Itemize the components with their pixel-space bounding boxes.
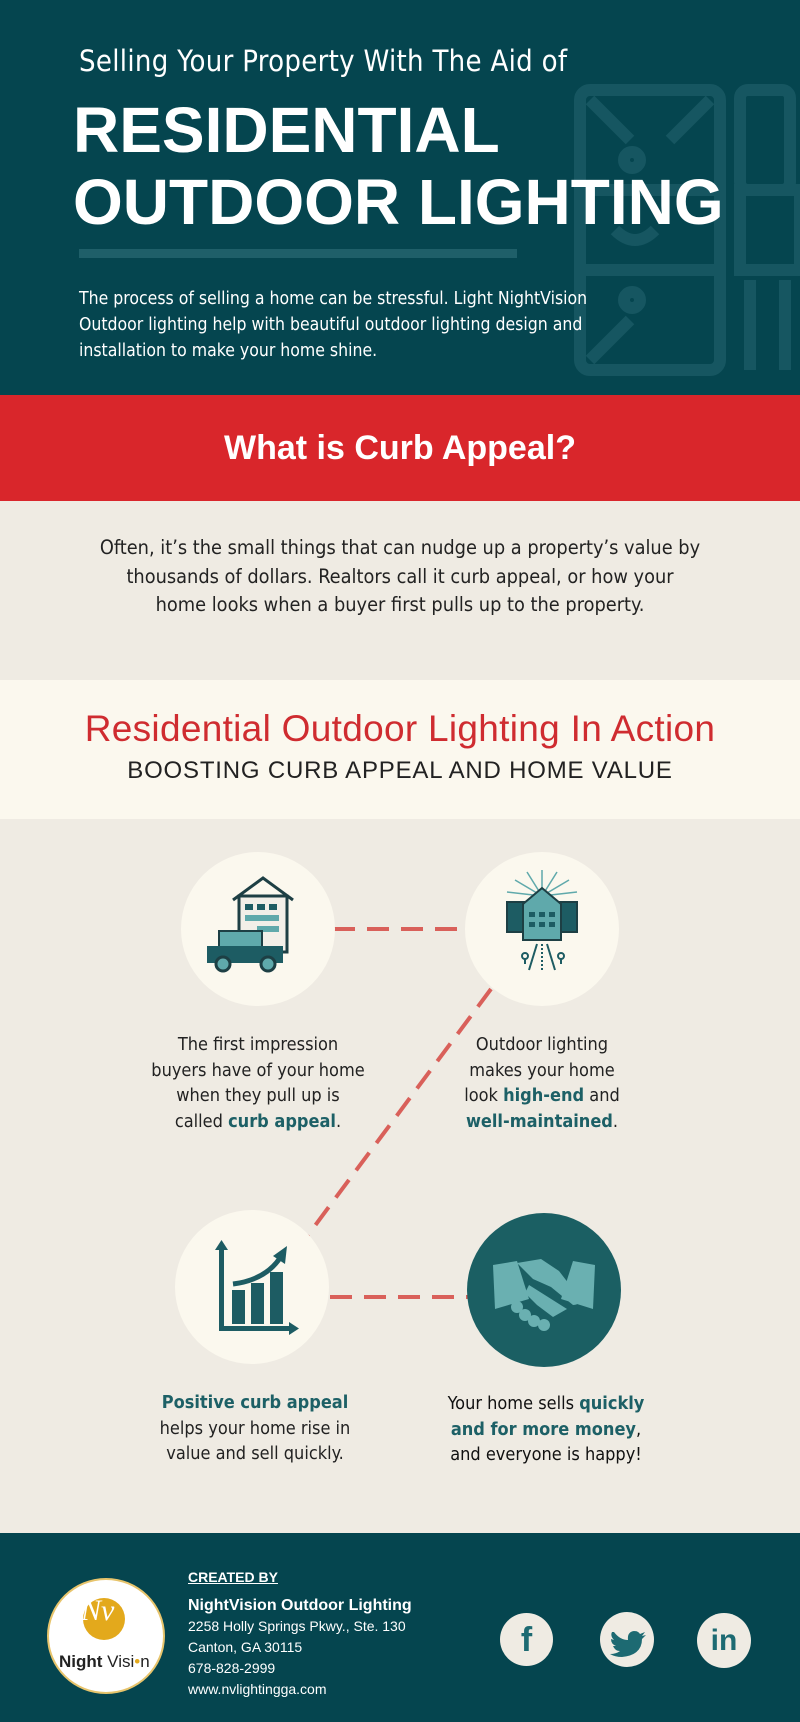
decorative background icon	[574, 84, 800, 376]
creator info: 2258 Holly Springs Pkwy., Ste. 130	[188, 1618, 406, 1634]
main title	[73, 94, 724, 238]
creator info: Canton, GA 30115	[188, 1639, 302, 1655]
creator info: www.nvlightingga.com	[188, 1681, 327, 1697]
step 1 text: buyers have of your home	[151, 1060, 365, 1080]
step 4 text: and everyone is happy!	[450, 1444, 642, 1465]
creator info: CREATED BY	[188, 1569, 278, 1585]
intro paragraph: The process of selling a home can be stressful. Light NightVision	[79, 289, 587, 309]
step 2 text: well-maintained.	[466, 1110, 618, 1132]
icon: growth chart	[175, 1210, 329, 1364]
step 2 text: look high-end and	[464, 1085, 620, 1106]
intro paragraph	[78, 289, 587, 361]
main title: OUTDOOR LIGHTING	[73, 166, 724, 238]
subheading: BOOSTING CURB APPEAL AND HOME VALUE	[127, 757, 673, 784]
section heading band	[0, 680, 800, 819]
step 4 text: Your home sells quickly	[448, 1393, 644, 1414]
step 1 text: called curb appeal.	[175, 1110, 341, 1132]
step 1 text: when they pull up is	[176, 1085, 340, 1106]
footer	[0, 1533, 800, 1722]
curb appeal text: Often, it’s the small things that can nudge up a property’s value by	[100, 536, 700, 559]
icon: house and car	[181, 852, 335, 1006]
intro paragraph: Outdoor lighting help with beautiful outdoor lighting design and	[79, 315, 582, 335]
step 1 text	[151, 1034, 365, 1132]
creator info: 678-828-2999	[188, 1660, 275, 1676]
step 1	[151, 852, 365, 1132]
step 3	[160, 1210, 350, 1464]
red heading: Residential Outdoor Lighting In Action	[85, 708, 715, 749]
step 3 text	[160, 1392, 350, 1464]
icon: twitter	[600, 1612, 654, 1667]
logo: Night Visi•n	[59, 1652, 150, 1671]
creator info	[188, 1569, 412, 1697]
curb appeal text	[100, 536, 700, 616]
step 2	[464, 852, 620, 1132]
red band heading	[0, 395, 800, 501]
curb appeal text: home looks when a buyer first pulls up to the property.	[156, 593, 644, 616]
step 1 text: The first impression	[178, 1034, 338, 1055]
subtitle: Selling Your Property With The Aid of	[79, 44, 567, 78]
icon: facebook	[500, 1613, 553, 1666]
header panel	[0, 0, 800, 395]
step 4	[448, 1213, 644, 1465]
logo: Nv	[81, 1594, 114, 1627]
step 3 text: value and sell quickly.	[166, 1443, 344, 1464]
icon: lit house	[465, 852, 619, 1006]
icon: linkedin	[697, 1613, 751, 1668]
main title: RESIDENTIAL	[73, 94, 500, 166]
creator info: NightVision Outdoor Lighting	[188, 1597, 412, 1614]
step 4 text: and for more money,	[451, 1418, 641, 1440]
connector dashed lines	[308, 927, 492, 1299]
red band heading: What is Curb Appeal?	[224, 429, 576, 467]
icon: handshake	[467, 1213, 621, 1367]
step 3 text: Positive curb appeal	[162, 1392, 348, 1413]
icon: linkedin: in	[711, 1624, 737, 1657]
intro paragraph: installation to make your home shine.	[79, 341, 377, 361]
icon: facebook: f	[521, 1621, 532, 1659]
logo	[47, 1578, 165, 1694]
step 2 text: makes your home	[469, 1060, 615, 1080]
curb appeal text: thousands of dollars. Realtors call it curb appeal, or how your	[126, 564, 674, 588]
step 2 text: Outdoor lighting	[476, 1034, 608, 1055]
step 3 text: helps your home rise in	[160, 1418, 350, 1438]
step 4 text	[448, 1393, 644, 1465]
title underline bar	[79, 249, 517, 258]
step 2 text	[464, 1034, 620, 1132]
